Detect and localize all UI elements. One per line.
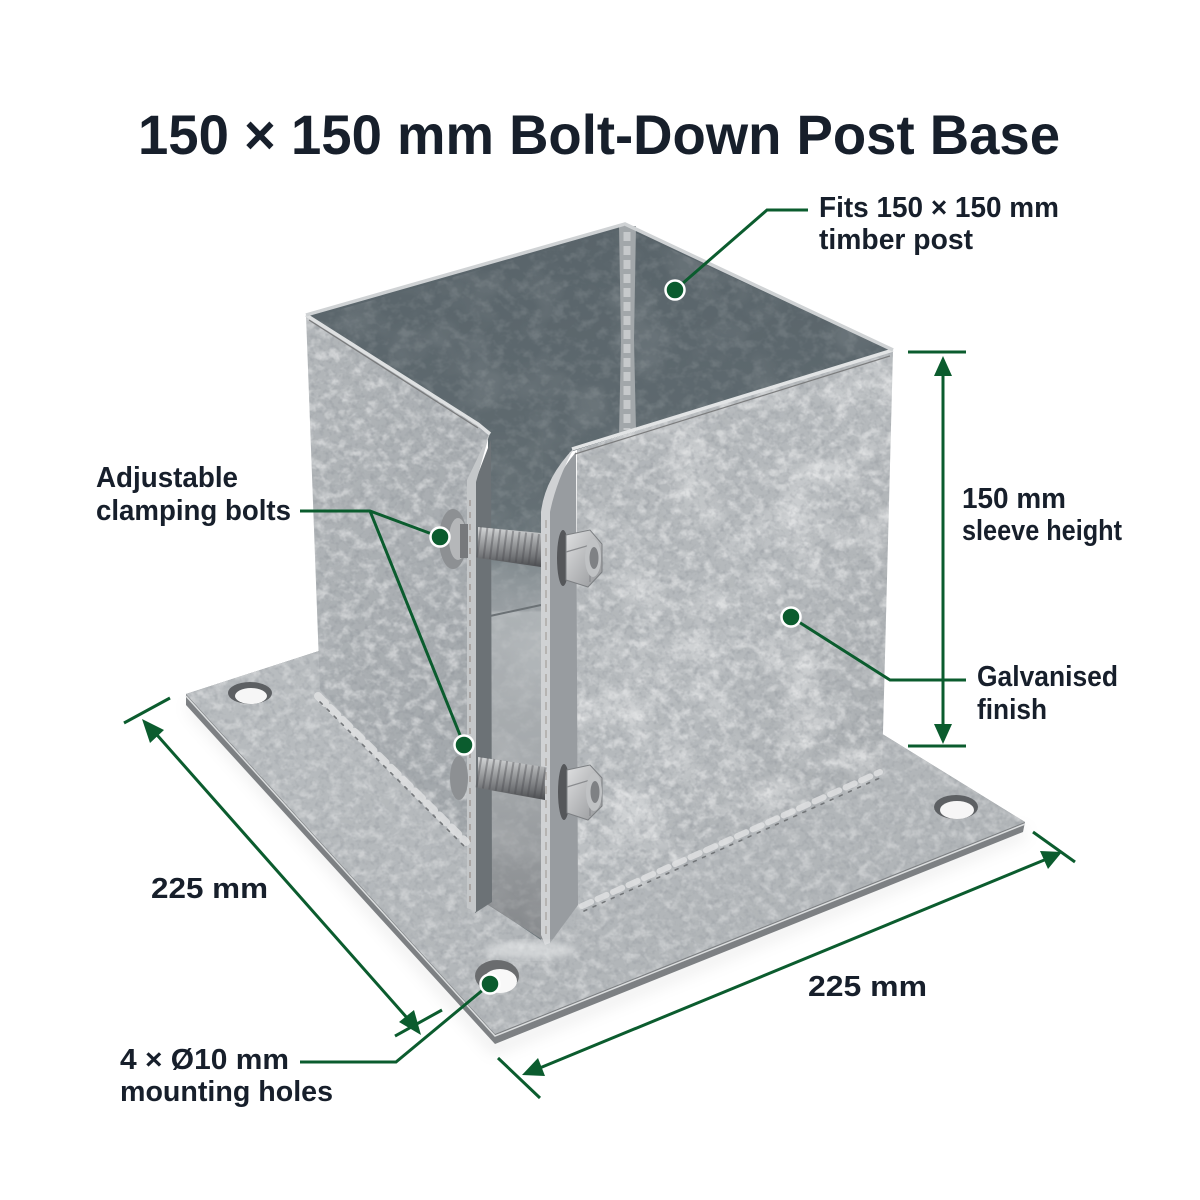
lower bolt [450,756,602,820]
dimension: front plate edge 225 mm: 225 mm [808,971,927,1003]
callout: galvanised finish [782,608,1118,726]
callout: galvanised finish: finish [977,694,1047,726]
dimension: sleeve height: sleeve height [962,515,1122,547]
title: 150 × 150 mm Bolt-Down Post Base [138,103,1060,166]
base plate [180,555,1030,1045]
callout: galvanised finish: Galvanised [977,661,1118,693]
callout: timber post: timber post [819,224,973,256]
plate shadow [190,705,1025,1048]
mounting holes [228,682,272,704]
right flange [550,452,578,943]
dimension: front plate edge 225 mm [498,832,1075,1098]
upper bolt [439,509,602,587]
dimension: left plate edge 225 mm [124,698,442,1036]
callout: mounting holes: mounting holes [120,1076,333,1108]
clamping bolts [439,509,602,820]
product illustration: galvanised post base [180,220,1030,1048]
right sleeve panel [306,224,895,945]
dimension: sleeve height: 150 mm [962,483,1066,515]
sleeve interior back wall [300,220,900,940]
dimension: left plate edge 225 mm: 225 mm [151,873,268,905]
dimension: sleeve height [908,352,1122,746]
left sleeve panel [300,310,495,913]
callout: clamping bolts: Adjustable [96,462,238,494]
callout: clamping bolts [96,462,474,754]
callout: clamping bolts: clamping bolts [96,495,291,527]
callout: timber post: Fits 150 × 150 mm [819,192,1059,224]
callout: mounting holes: 4 × Ø10 mm [120,1044,289,1076]
callout: mounting holes [120,974,500,1108]
weld beads [318,696,882,959]
callout: timber post [666,192,1059,300]
interior weld seam [619,226,636,436]
left flange [475,440,492,913]
